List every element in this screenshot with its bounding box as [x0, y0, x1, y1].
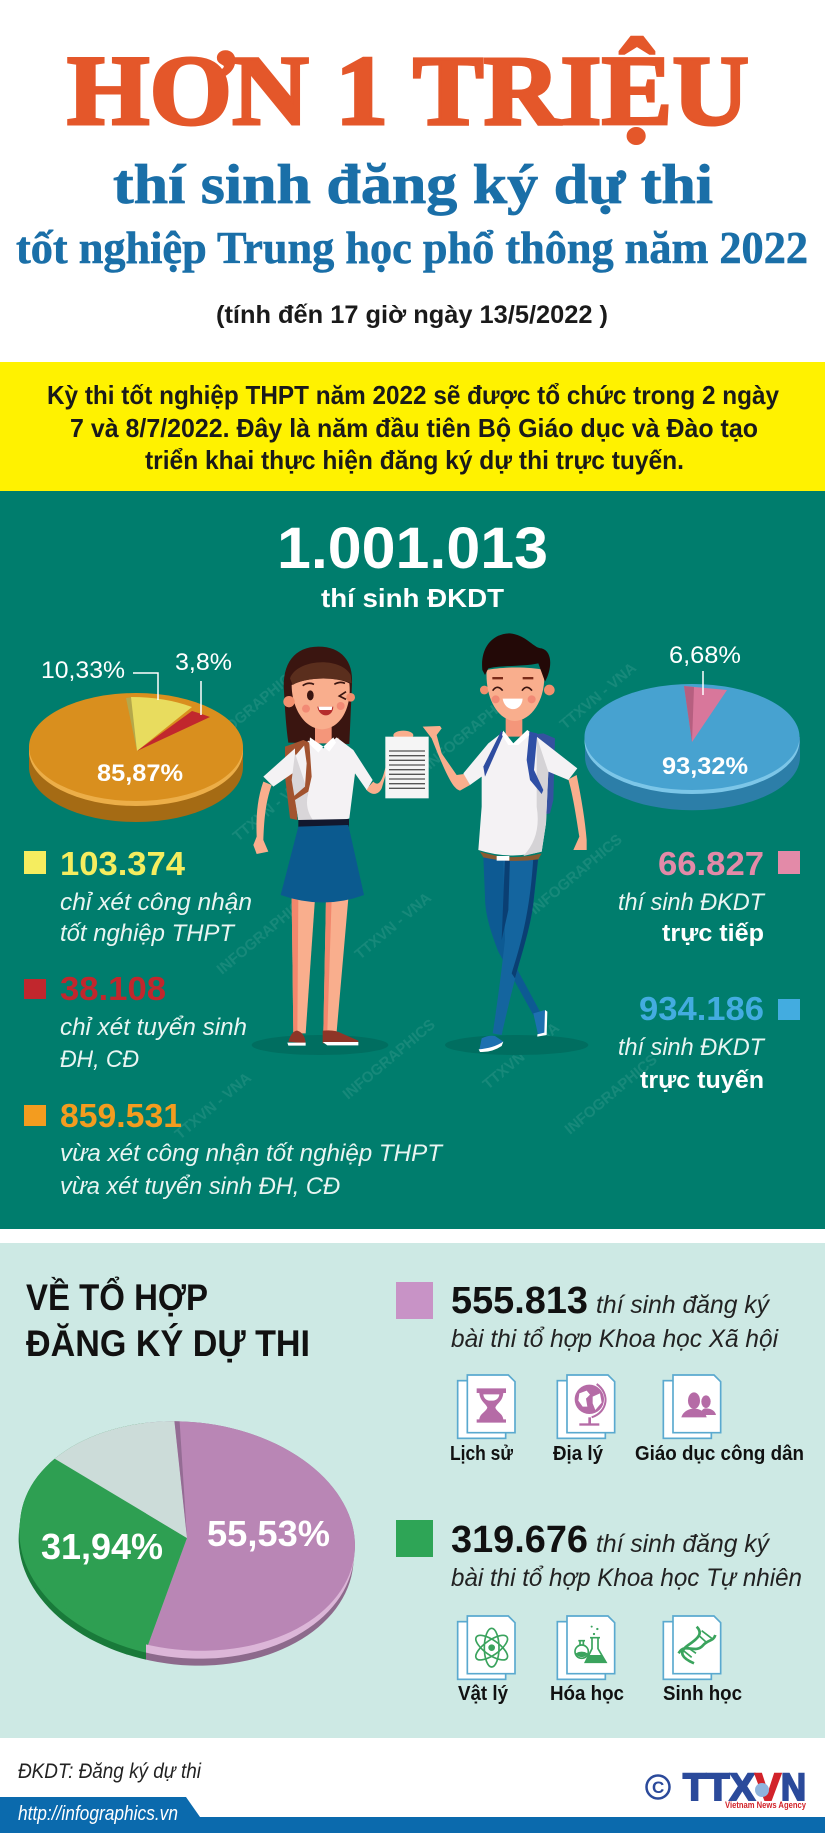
date note: (tính đến 17 giờ ngày 13/5/2022 ) — [216, 301, 608, 329]
pie chart: registration method: 6,68% — [669, 642, 741, 669]
legend: 38.108: ĐH, CĐ — [60, 1046, 139, 1073]
legend: social sciences: bài thi tổ hợp Khoa học Xã hội — [451, 1325, 779, 1353]
legend: 38.108: chỉ xét tuyển sinh — [60, 1014, 247, 1041]
legend: 66.827: trực tiếp — [662, 920, 764, 947]
illustration: two students — [252, 633, 588, 1055]
legend: 859.531 — [24, 1097, 444, 1200]
legend: 859.531: 859.531 — [60, 1097, 182, 1134]
legend: 66.827: 66.827 — [658, 845, 764, 882]
icons: natural sciences subjects — [458, 1616, 721, 1679]
legend: 934.186: 934.186 — [639, 990, 764, 1027]
pie chart: purpose of registration: 10,33% — [41, 657, 125, 684]
girl — [253, 647, 387, 1046]
subject labels: social sciences: Lịch sử — [450, 1443, 513, 1465]
legend: natural sciences: thí sinh đăng ký — [596, 1530, 770, 1558]
subject labels: social sciences — [450, 1443, 804, 1465]
logo: TTXVN: C — [652, 1778, 664, 1797]
watermarks: TTXVN - VNA — [230, 771, 313, 845]
pie chart: registration method: 93,32% — [662, 753, 748, 780]
total caption: thí sinh ĐKDT — [321, 583, 504, 613]
icon: civic education — [663, 1375, 721, 1438]
legend: social sciences: thí sinh đăng ký — [596, 1291, 770, 1319]
legend: 934.186: trực tuyến — [640, 1067, 764, 1094]
legend: social sciences: 555.813 — [451, 1280, 588, 1322]
watermarks: TTXVN - VNA — [352, 889, 435, 963]
heading: ĐĂNG KÝ DỰ THI — [26, 1323, 310, 1364]
logo: TTXVN — [646, 1767, 806, 1810]
pie chart: combinations — [18, 1421, 355, 1666]
panel: intro: Kỳ thi tốt nghiệp THPT năm 2022 sẽ được tổ chức trong 2 ngày — [47, 380, 779, 410]
watermarks: INFOGRAPHICS — [340, 1016, 439, 1103]
subject labels: natural sciences: Sinh học — [663, 1683, 742, 1705]
subject labels: social sciences: Địa lý — [553, 1443, 604, 1465]
footer ribbon: http://infographics.vn — [18, 1803, 178, 1825]
title: HƠN 1 TRIỆU — [67, 35, 749, 146]
legend: natural sciences: 319.676 — [451, 1519, 588, 1561]
icon: geography — [557, 1375, 615, 1438]
footer ribbon — [0, 1797, 825, 1833]
title: thí sinh đăng ký dự thi — [113, 154, 713, 216]
footnote: ĐKDT: Đăng ký dự thi — [18, 1760, 202, 1783]
icon: physics — [458, 1616, 515, 1679]
logo: TTXVN: N — [781, 1767, 806, 1809]
pie chart: purpose of registration: 3,8% — [175, 649, 232, 676]
heading — [26, 1275, 310, 1364]
watermarks: INFOGRAPHICS — [527, 831, 626, 918]
watermarks: INFOGRAPHICS — [422, 686, 521, 773]
title: tốt nghiệp Trung học phổ thông năm 2022 — [16, 223, 808, 273]
legend: 103.374: 103.374 — [60, 845, 186, 882]
watermarks: TTXVN - VNA — [480, 1019, 563, 1093]
logo: TTXVN: V — [755, 1767, 782, 1809]
legend: 103.374 — [24, 845, 252, 947]
icon: chemistry — [557, 1616, 615, 1679]
panel: intro — [0, 362, 825, 491]
pie chart: purpose of registration — [29, 649, 243, 822]
watermarks: INFOGRAPHICS — [562, 1051, 661, 1138]
panel: exam combinations — [0, 1243, 825, 1738]
boy — [423, 633, 587, 1052]
legend: 934.186 — [618, 990, 800, 1094]
panel: intro: triển khai thực hiện đăng ký dự thi trực tuyến. — [145, 445, 684, 475]
watermarks: INFOGRAPHICS — [204, 664, 303, 751]
document — [385, 731, 429, 798]
legend: 859.531: vừa xét công nhận tốt nghiệp THPT — [60, 1140, 444, 1167]
pie chart: combinations: 31,94% — [41, 1526, 163, 1567]
watermarks — [172, 659, 661, 1143]
subject labels: natural sciences: Hóa học — [550, 1683, 624, 1705]
legend: social sciences — [396, 1280, 779, 1353]
legend: 103.374: tốt nghiệp THPT — [60, 920, 236, 947]
watermarks: TTXVN - VNA — [172, 1069, 255, 1143]
legend: 38.108: 38.108 — [60, 970, 166, 1007]
legend: 38.108 — [24, 970, 247, 1073]
legend: 103.374: chỉ xét công nhận — [60, 889, 252, 916]
legend: natural sciences: bài thi tổ hợp Khoa học Tự nhiên — [451, 1564, 802, 1592]
logo: TTXVN: TTX — [683, 1767, 756, 1809]
legend: 66.827 — [618, 845, 800, 947]
pie chart: combinations: 55,53% — [207, 1513, 330, 1554]
panel: intro: 7 và 8/7/2022. Đây là năm đầu tiên Bộ Giáo dục và Đào tạo — [70, 413, 758, 443]
subject labels: social sciences: Giáo dục công dân — [635, 1443, 804, 1465]
legend: 66.827: thí sinh ĐKDT — [618, 889, 766, 916]
subject labels: natural sciences: Vật lý — [458, 1683, 509, 1705]
legend: natural sciences — [396, 1519, 802, 1592]
pie chart: registration method — [584, 642, 800, 810]
panel: totals — [0, 491, 825, 1229]
legend: 934.186: thí sinh ĐKDT — [618, 1034, 766, 1061]
title — [16, 35, 808, 273]
icon: history — [458, 1375, 515, 1438]
heading: VỀ TỔ HỢP — [26, 1275, 208, 1318]
total number: 1.001.013 — [277, 516, 548, 581]
icon: biology — [663, 1616, 721, 1679]
watermarks: TTXVN - VNA — [557, 659, 640, 733]
icons: social sciences subjects — [458, 1375, 721, 1438]
subject labels: natural sciences — [458, 1683, 742, 1705]
pie chart: purpose of registration: 85,87% — [97, 760, 183, 787]
watermarks: INFOGRAPHICS — [214, 891, 313, 978]
legend: 859.531: vừa xét tuyển sinh ĐH, CĐ — [60, 1173, 340, 1200]
logo: TTXVN: Vietnam News Agency — [725, 1800, 806, 1810]
